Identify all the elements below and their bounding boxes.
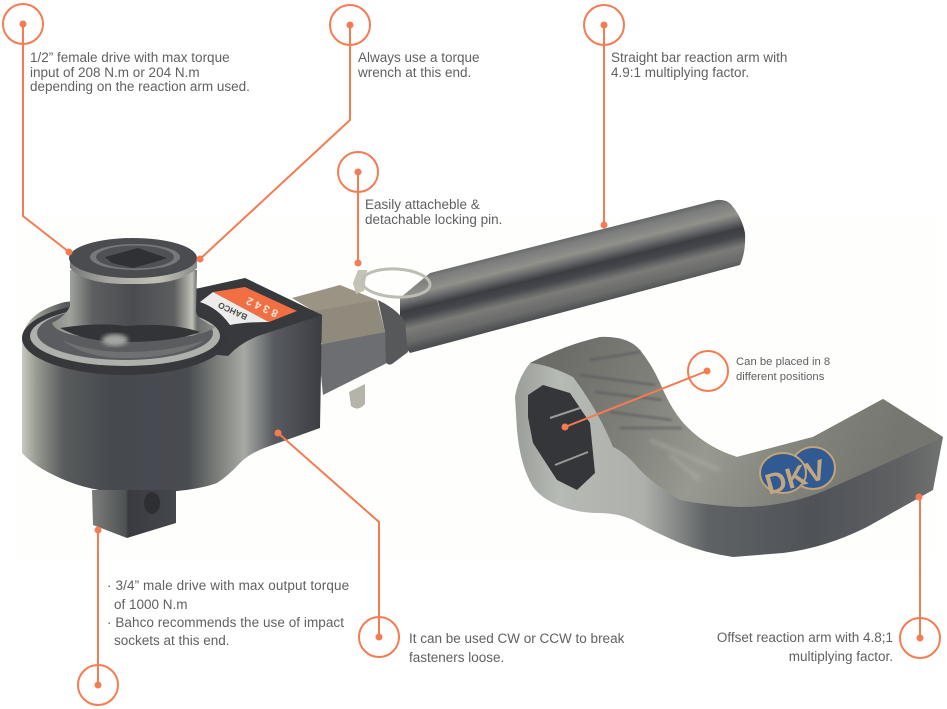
callout: straight bar bbox=[584, 5, 787, 228]
recessed bowl bbox=[37, 306, 213, 360]
hex collar and locking pin bbox=[292, 267, 431, 409]
top face bbox=[160, 278, 322, 356]
callout: offset arm: Offset reaction arm with 4.8;1 bbox=[717, 630, 893, 645]
callout: straight bar: 4.9:1 multiplying factor. bbox=[611, 65, 749, 80]
body label: BAHCO bbox=[216, 300, 249, 322]
callout: locking pin: detachable locking pin. bbox=[365, 212, 502, 227]
callout: male drive: sockets at this end. bbox=[114, 633, 230, 648]
arm logo: DKV bbox=[762, 454, 830, 502]
callout: straight bar: Straight bar reaction arm with bbox=[611, 50, 787, 65]
callout: torque wrench: wrench at this end. bbox=[357, 65, 471, 80]
callout: CW or CCW: It can be used CW or CCW to break bbox=[409, 631, 625, 646]
straight bar reaction arm bbox=[400, 200, 745, 353]
black rim bbox=[22, 301, 228, 375]
callout: 8 positions: Can be placed in 8 bbox=[736, 356, 830, 368]
callout: locking pin bbox=[338, 152, 502, 266]
callout: female drive bbox=[3, 4, 250, 256]
callout: 8 positions: different positions bbox=[736, 371, 825, 383]
callout: CW or CCW: fasteners loose. bbox=[409, 650, 504, 665]
callout: male drive: · 3/4” male drive with max output torque bbox=[107, 578, 349, 593]
callout: male drive: · Bahco recommends the use of impact bbox=[107, 615, 344, 630]
body label bbox=[200, 287, 297, 325]
callout: female drive: input of 208 N.m or 204 N.m bbox=[30, 65, 200, 80]
callout: locking pin: Easily attacheble & bbox=[365, 197, 480, 212]
callout: female drive: depending on the reaction arm used. bbox=[30, 79, 250, 94]
callout: male drive bbox=[78, 526, 349, 705]
male square drive bbox=[92, 490, 176, 538]
body label: 8 3 4 2 bbox=[245, 294, 280, 319]
callout: torque wrench bbox=[196, 5, 480, 262]
light inner ring bbox=[30, 306, 220, 366]
callout: female drive: 1/2” female drive with max torque bbox=[30, 50, 230, 65]
callout: 8 positions bbox=[562, 351, 830, 430]
offset reaction arm bbox=[515, 337, 943, 557]
callout: torque wrench: Always use a torque bbox=[358, 50, 480, 65]
input neck and square drive socket bbox=[52, 238, 215, 358]
callout: offset arm: multiplying factor. bbox=[789, 649, 893, 664]
multiplier body bbox=[22, 278, 322, 493]
callout: male drive: of 1000 N.m bbox=[114, 597, 188, 612]
callout: CW or CCW bbox=[274, 430, 625, 665]
callout: offset arm bbox=[717, 494, 940, 664]
